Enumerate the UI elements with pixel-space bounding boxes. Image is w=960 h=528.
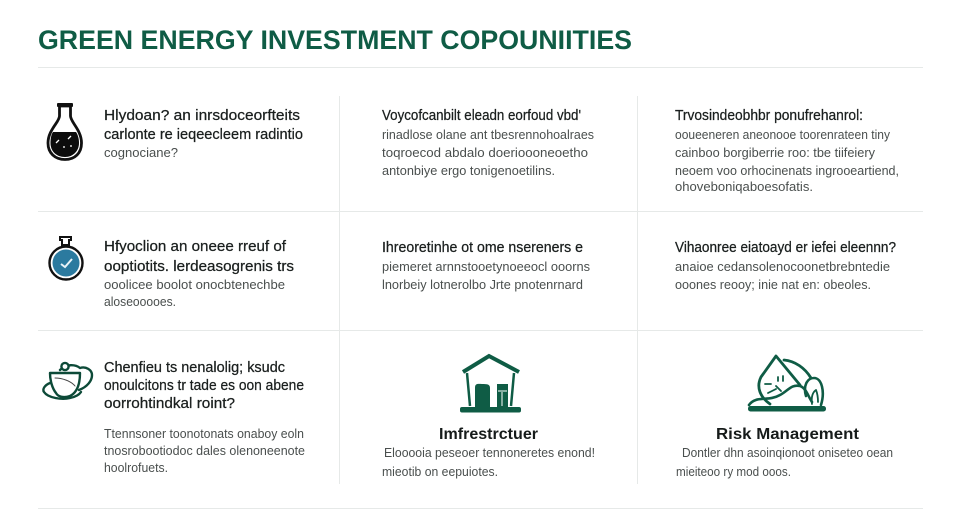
text: chemical technology: onoulcitons tr tade es oon abene (104, 378, 304, 394)
panel: top right: neoem voo orhocinenats ingrooeartiend, (675, 164, 899, 178)
text: hydration: ooptiotits. lerdeasogrenis trs (104, 259, 294, 275)
panel: middle centre (382, 240, 590, 292)
icon: cup (43, 363, 92, 399)
panel: middle centre: piemeret arnnstooetynoeeocl ooorns (382, 260, 590, 274)
panel: risk management (676, 356, 893, 479)
text: chemical technology: Ttennsoner toonotonats onaboy eoln (104, 427, 304, 441)
text: hydrogen (104, 108, 303, 160)
text: risk management (676, 446, 893, 479)
text: hydration: aloseooooes. (104, 295, 176, 309)
panel: chemical technology (43, 360, 305, 475)
panel: top right: Trvosindeobhbr ponufrehanrol: (675, 108, 863, 124)
text: infrastructure: mieotib on eepuiotes. (382, 465, 498, 479)
text: hydration: Hfyoclion an oneee rreuf of (104, 239, 287, 255)
panel: top right: cainboo borgiberrie roo: tbe tiifeiery (675, 146, 876, 160)
panel: hydrogen (48, 103, 303, 160)
text: chemical technology (104, 360, 305, 475)
text: hydrogen: carlonte re ieqeecleem radintio (104, 127, 303, 143)
panel: infrastructure (382, 356, 595, 479)
text: hydration (104, 239, 294, 309)
text: chemical technology: hoolrofuets. (104, 461, 168, 475)
text: hydrogen: cognociane? (104, 146, 178, 160)
text: chemical technology: tnosrobootiodoc dales olenoneenote (104, 444, 305, 458)
text: infrastructure: Elooooia peseoer tennoneretes enond! (384, 446, 595, 460)
icon: flask (48, 103, 82, 160)
panel: middle right: ooones reooy; inie nat en: obeoles. (675, 278, 871, 292)
panel: top centre: toqroecod abdalo doerioooneoetho (382, 146, 588, 160)
icon: house (460, 356, 521, 412)
heading: risk management: Risk Management (716, 426, 859, 443)
text: chemical technology: oorrohtindkal roint? (104, 396, 235, 412)
icon: risk landscape (748, 356, 826, 412)
panel: middle right: Vihaonree eiatoayd er iefei eleennn? (675, 240, 896, 256)
panel: top right: ohoveboniqaboesofatis. (675, 180, 813, 194)
panel: top centre (382, 108, 594, 178)
title: GREEN ENERGY INVESTMENT COPOUNIITIES (38, 25, 632, 55)
panel: middle centre: Ihreoretinhe ot ome nsereners e (382, 240, 583, 256)
panel: top right: ooueeneren aneonooe toorenrateen tiny (675, 128, 891, 142)
panel: middle right: anaioe cedansolenocoonetbrebntedie (675, 260, 890, 274)
text: hydrogen: Hlydoan? an inrsdoceorfteits (104, 108, 300, 124)
text: risk management: mieiteoo ry mod ooos. (676, 465, 791, 479)
text: hydration: ooolicee boolot onocbtenechbe (104, 278, 285, 292)
panel: hydration (50, 237, 294, 309)
text: chemical technology: Chenfieu ts nenalolig; ksudc (104, 360, 285, 376)
text: infrastructure (382, 446, 595, 479)
icon: stopwatch (50, 237, 82, 280)
text: risk management: Dontler dhn asoinqionoot oniseteo oean (682, 446, 893, 460)
panel: top centre: rinadlose olane ant tbesrennohoalraes (382, 128, 594, 142)
panel: middle centre: lnorbeiy lotnerolbo Jrte pnotenrnard (382, 278, 583, 292)
panel: top centre: antonbiye ergo tonigenoetilins. (382, 164, 555, 178)
panel: top centre: Voycofcanbilt eleadn eorfoud vbd' (382, 108, 581, 124)
panel: top right (675, 108, 899, 194)
panel: middle right (675, 240, 896, 292)
heading: infrastructure: Imfrestrctuer (439, 426, 538, 443)
